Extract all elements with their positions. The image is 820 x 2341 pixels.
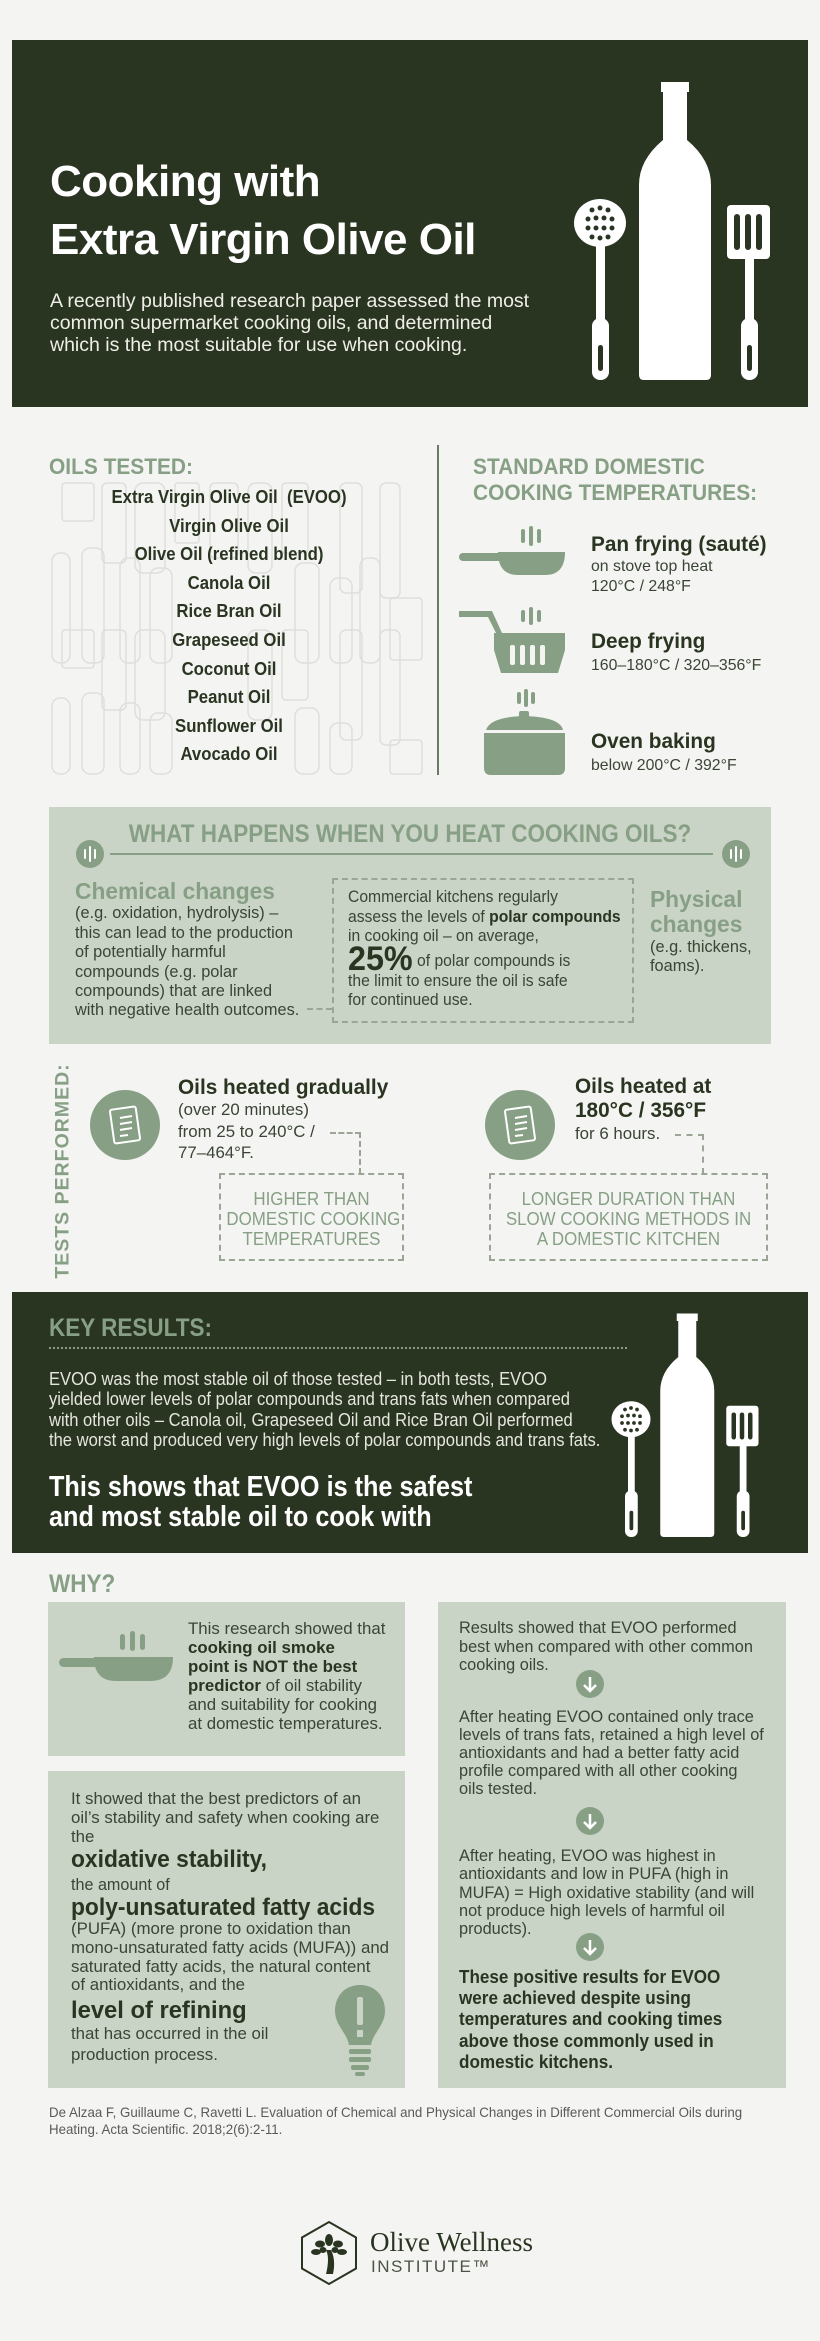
smoke point text: at domestic temperatures.	[188, 1714, 383, 1733]
key statement	[49, 1471, 472, 1533]
predictors text	[71, 1789, 379, 1846]
result text 2: oils tested.	[459, 1779, 537, 1798]
result text 3: After heating, EVOO was highest in	[459, 1846, 716, 1865]
chemical changes text: Chemical changes	[75, 878, 275, 904]
dashed callout: polar compounds: 25% of polar compounds is	[348, 940, 570, 978]
text: oven baking: Oven baking	[591, 730, 716, 753]
text: oven baking	[591, 730, 737, 774]
predictors text: It showed that the best predictors of an	[71, 1789, 361, 1808]
oils list: Coconut Oil	[182, 659, 276, 679]
header illustration: bottle and utensils	[574, 82, 770, 380]
icon: deep fryer	[459, 607, 565, 673]
result text 3: antioxidants and low in PUFA (high in	[459, 1864, 728, 1883]
text: oven baking: below 200°C / 392°F	[591, 757, 737, 774]
text: deep frying: Deep frying	[591, 630, 705, 653]
key results paragraph	[49, 1369, 600, 1450]
text: pan frying	[591, 533, 767, 595]
panel: results	[438, 1602, 786, 2088]
physical changes text: Physical	[650, 886, 742, 912]
title: Cooking with	[50, 157, 320, 206]
result text 1: cooking oils.	[459, 1655, 549, 1674]
icon: skimmer ladle	[574, 199, 626, 380]
heading: standard domestic cooking temperatures: STANDARD DOMESTIC	[473, 454, 705, 479]
panel: best predictors: mono-unsaturated fatty acids (MUFA)) and	[71, 1938, 389, 1957]
panel: best predictors: (PUFA) (more prone to oxidation than	[71, 1919, 351, 1938]
panel: best predictors: production process.	[71, 2045, 218, 2064]
dashed callout: polar compounds: the limit to ensure the oil is safe	[348, 972, 568, 990]
oils list	[111, 487, 347, 764]
icon: bottle	[660, 1314, 714, 1537]
physical changes text: changes	[650, 911, 742, 937]
intro paragraph: which is the most suitable for use when cooking.	[50, 334, 467, 356]
arrow 3	[576, 1933, 604, 1961]
panel: best predictors	[48, 1771, 405, 2088]
conclusion text: above those commonly used in	[459, 2031, 714, 2051]
predictors text: the	[71, 1827, 94, 1846]
icon: frying pan	[459, 526, 565, 575]
connector 2	[675, 1134, 704, 1174]
heading: standard domestic cooking temperatures: COOKING TEMPERATURES:	[473, 480, 757, 505]
intro paragraph: A recently published research paper assessed the most	[50, 290, 529, 312]
panel: best predictors: oxidative stability,	[71, 1846, 267, 1873]
smoke point text: point is NOT the best	[188, 1657, 357, 1676]
predictors text: oil’s stability and safety when cooking are	[71, 1808, 379, 1827]
key results paragraph: yielded lower levels of polar compounds and trans fats when compared	[49, 1389, 570, 1409]
physical changes text: foams).	[650, 957, 704, 975]
text: oils heated gradually: 77–464°F.	[178, 1143, 254, 1162]
oils list: Avocado Oil	[180, 744, 278, 764]
panel: best predictors: the amount of	[71, 1875, 170, 1894]
chemical changes text	[75, 878, 299, 1019]
title	[50, 157, 476, 264]
icon: lightbulb	[335, 1985, 385, 2076]
key statement: and most stable oil to cook with	[49, 1501, 432, 1533]
logo text: Olive Wellness	[370, 2227, 533, 2257]
callout box: higher than domestic	[219, 1173, 404, 1261]
oils list: Olive Oil (refined blend)	[135, 544, 323, 564]
chemical changes text: with negative health outcomes.	[75, 1001, 299, 1019]
icon: bottle	[639, 82, 711, 380]
text: pan frying: Pan frying (sauté)	[591, 533, 767, 556]
panel: best predictors: poly-unsaturated fatty acids	[71, 1894, 375, 1921]
result text 2: levels of trans fats, retained a high level of	[459, 1725, 764, 1744]
text: deep frying	[591, 630, 761, 674]
icon: clipboard 1	[90, 1090, 160, 1160]
conclusion text: were achieved despite using	[459, 1988, 691, 2008]
text: oils heated gradually: (over 20 minutes)	[178, 1100, 309, 1119]
physical changes text	[650, 886, 752, 975]
smoke point text: and suitability for cooking	[188, 1695, 377, 1714]
smoke point text: This research showed that	[188, 1619, 385, 1638]
panel: best predictors: of antioxidants, and the	[71, 1975, 245, 1994]
smoke point text: cooking oil smoke	[188, 1638, 335, 1657]
key statement: This shows that EVOO is the safest	[49, 1471, 472, 1503]
heading: key results: KEY RESULTS:	[49, 1314, 212, 1342]
oils list: Sunflower Oil	[175, 716, 283, 736]
heading: tests performed (vertical): TESTS PERFORMED:	[52, 1063, 74, 1279]
arrow 1	[576, 1670, 604, 1698]
dashed callout: polar compounds: in cooking oil – on average,	[348, 927, 539, 945]
heading: oils tested: OILS TESTED:	[49, 454, 193, 479]
icon: clipboard 2	[485, 1090, 555, 1160]
panel: what happens when you heat cooking oils	[49, 807, 771, 1044]
chemical changes text: compounds (e.g. polar	[75, 963, 238, 981]
chemical changes text: of potentially harmful	[75, 943, 226, 961]
text: oils heated gradually: from 25 to 240°C /	[178, 1122, 315, 1141]
chemical changes text: this can lead to the production	[75, 924, 293, 942]
conclusion text: temperatures and cooking times	[459, 2009, 722, 2029]
heading: WHAT HAPPENS WHEN YOU HEAT COOKING OILS?	[129, 820, 691, 848]
text: pan frying: on stove top heat	[591, 558, 713, 575]
result text 3: not produce high levels of harmful oil	[459, 1901, 725, 1920]
key results paragraph: with other oils – Canola oil, Grapeseed Oil and Rice Bran Oil performed	[49, 1410, 573, 1430]
oils list: Extra Virgin Olive Oil (EVOO)	[111, 487, 347, 507]
text: deep frying: 160–180°C / 320–356°F	[591, 657, 761, 674]
heading rule with icons	[76, 840, 750, 868]
callout box: longer duration	[489, 1173, 768, 1261]
oils list: Rice Bran Oil	[176, 601, 282, 621]
oils list: Canola Oil	[188, 573, 270, 593]
icon: pan	[59, 1631, 173, 1681]
icon: spatula	[727, 205, 770, 380]
citation	[49, 2104, 742, 2137]
panel: best predictors: level of refining	[71, 1997, 247, 2024]
title: Extra Virgin Olive Oil	[50, 215, 476, 264]
oils list: Virgin Olive Oil	[169, 516, 289, 536]
intro paragraph: common supermarket cooking oils, and determined	[50, 312, 492, 334]
arrow 2	[576, 1807, 604, 1835]
text: oils heated gradually: Oils heated gradually	[178, 1076, 388, 1099]
citation: Heating. Acta Scientific. 2018;2(6):2-11.	[49, 2121, 282, 2137]
panel: key results	[12, 1292, 808, 1553]
header panel	[12, 40, 808, 407]
result text 2: antioxidants and had a better fatty acid	[459, 1743, 739, 1762]
citation: De Alzaa F, Guillaume C, Ravetti L. Evaluation of Chemical and Physical Changes in Different Commercial Oils during	[49, 2104, 742, 2120]
icon: hexagon tree	[301, 2221, 357, 2286]
dashed callout: polar compounds	[332, 878, 634, 1023]
physical changes text: (e.g. thickens,	[650, 938, 752, 956]
result text 3	[459, 1846, 754, 1938]
callout box: higher than domestic: DOMESTIC COOKING	[226, 1209, 400, 1229]
panel: best predictors: that has occurred in the oil	[71, 2024, 268, 2043]
text: oils heated gradually	[178, 1076, 388, 1162]
dashed callout: polar compounds: Commercial kitchens regularly	[348, 888, 558, 906]
key results paragraph: EVOO was the most stable oil of those tested – in both tests, EVOO	[49, 1369, 547, 1389]
conclusion text: domestic kitchens.	[459, 2052, 613, 2072]
callout box: longer duration: SLOW COOKING METHODS IN	[506, 1209, 751, 1229]
heading: why: WHY?	[49, 1570, 115, 1598]
icon: spatula	[726, 1406, 758, 1537]
callout box: longer duration: LONGER DURATION THAN	[522, 1189, 735, 1209]
oils list: Grapeseed Oil	[172, 630, 286, 650]
connector 1	[330, 1132, 361, 1174]
text: oils heated at 180: 180°C / 356°F	[575, 1098, 706, 1122]
key results illustration: bottle and utensils	[612, 1314, 758, 1537]
chemical changes text: compounds) that are linked	[75, 982, 272, 1000]
conclusion text	[459, 1967, 722, 2072]
text: pan frying: 120°C / 248°F	[591, 578, 691, 595]
callout box: longer duration: A DOMESTIC KITCHEN	[537, 1229, 720, 1249]
smoke point text	[188, 1619, 386, 1733]
logo: olive wellness institute: INSTITUTE™	[371, 2257, 491, 2276]
text: oils heated at 180	[575, 1075, 712, 1143]
logo: olive wellness institute	[301, 2221, 533, 2286]
chemical changes text: (e.g. oxidation, hydrolysis) –	[75, 904, 278, 922]
result text 3: MUFA) = High oxidative stability (and will	[459, 1883, 754, 1902]
callout box: higher than domestic: HIGHER THAN	[253, 1189, 370, 1209]
dashed callout: polar compounds: for continued use.	[348, 991, 473, 1009]
dashed callout: polar compounds: assess the levels of polar compounds	[348, 908, 621, 926]
text: oils heated at 180: for 6 hours.	[575, 1124, 660, 1143]
result text 2	[459, 1707, 764, 1798]
result text 1: Results showed that EVOO performed	[459, 1618, 737, 1637]
result text 3: products).	[459, 1919, 532, 1938]
intro paragraph	[50, 290, 529, 356]
conclusion text: These positive results for EVOO	[459, 1967, 720, 1987]
panel: smoke point	[48, 1602, 405, 1756]
key results paragraph: the worst and produced very high levels of polar compounds and trans fats.	[49, 1430, 600, 1450]
result text 1: best when compared with other common	[459, 1637, 753, 1656]
text: oils heated at 180: Oils heated at	[575, 1075, 711, 1098]
oils list: Peanut Oil	[188, 687, 270, 707]
icon: skimmer ladle	[612, 1401, 650, 1537]
heading: standard domestic cooking temperatures	[473, 454, 757, 505]
result text 2: After heating EVOO contained only trace	[459, 1707, 754, 1726]
panel: best predictors: saturated fatty acids, the natural content	[71, 1957, 370, 1976]
background bottle outlines	[51, 482, 423, 775]
smoke point text: predictor of oil stability	[188, 1676, 362, 1695]
result text 1	[459, 1618, 753, 1674]
icon: pot	[484, 689, 565, 775]
callout box: higher than domestic: TEMPERATURES	[243, 1229, 380, 1249]
result text 2: profile compared with all other cooking	[459, 1761, 738, 1780]
